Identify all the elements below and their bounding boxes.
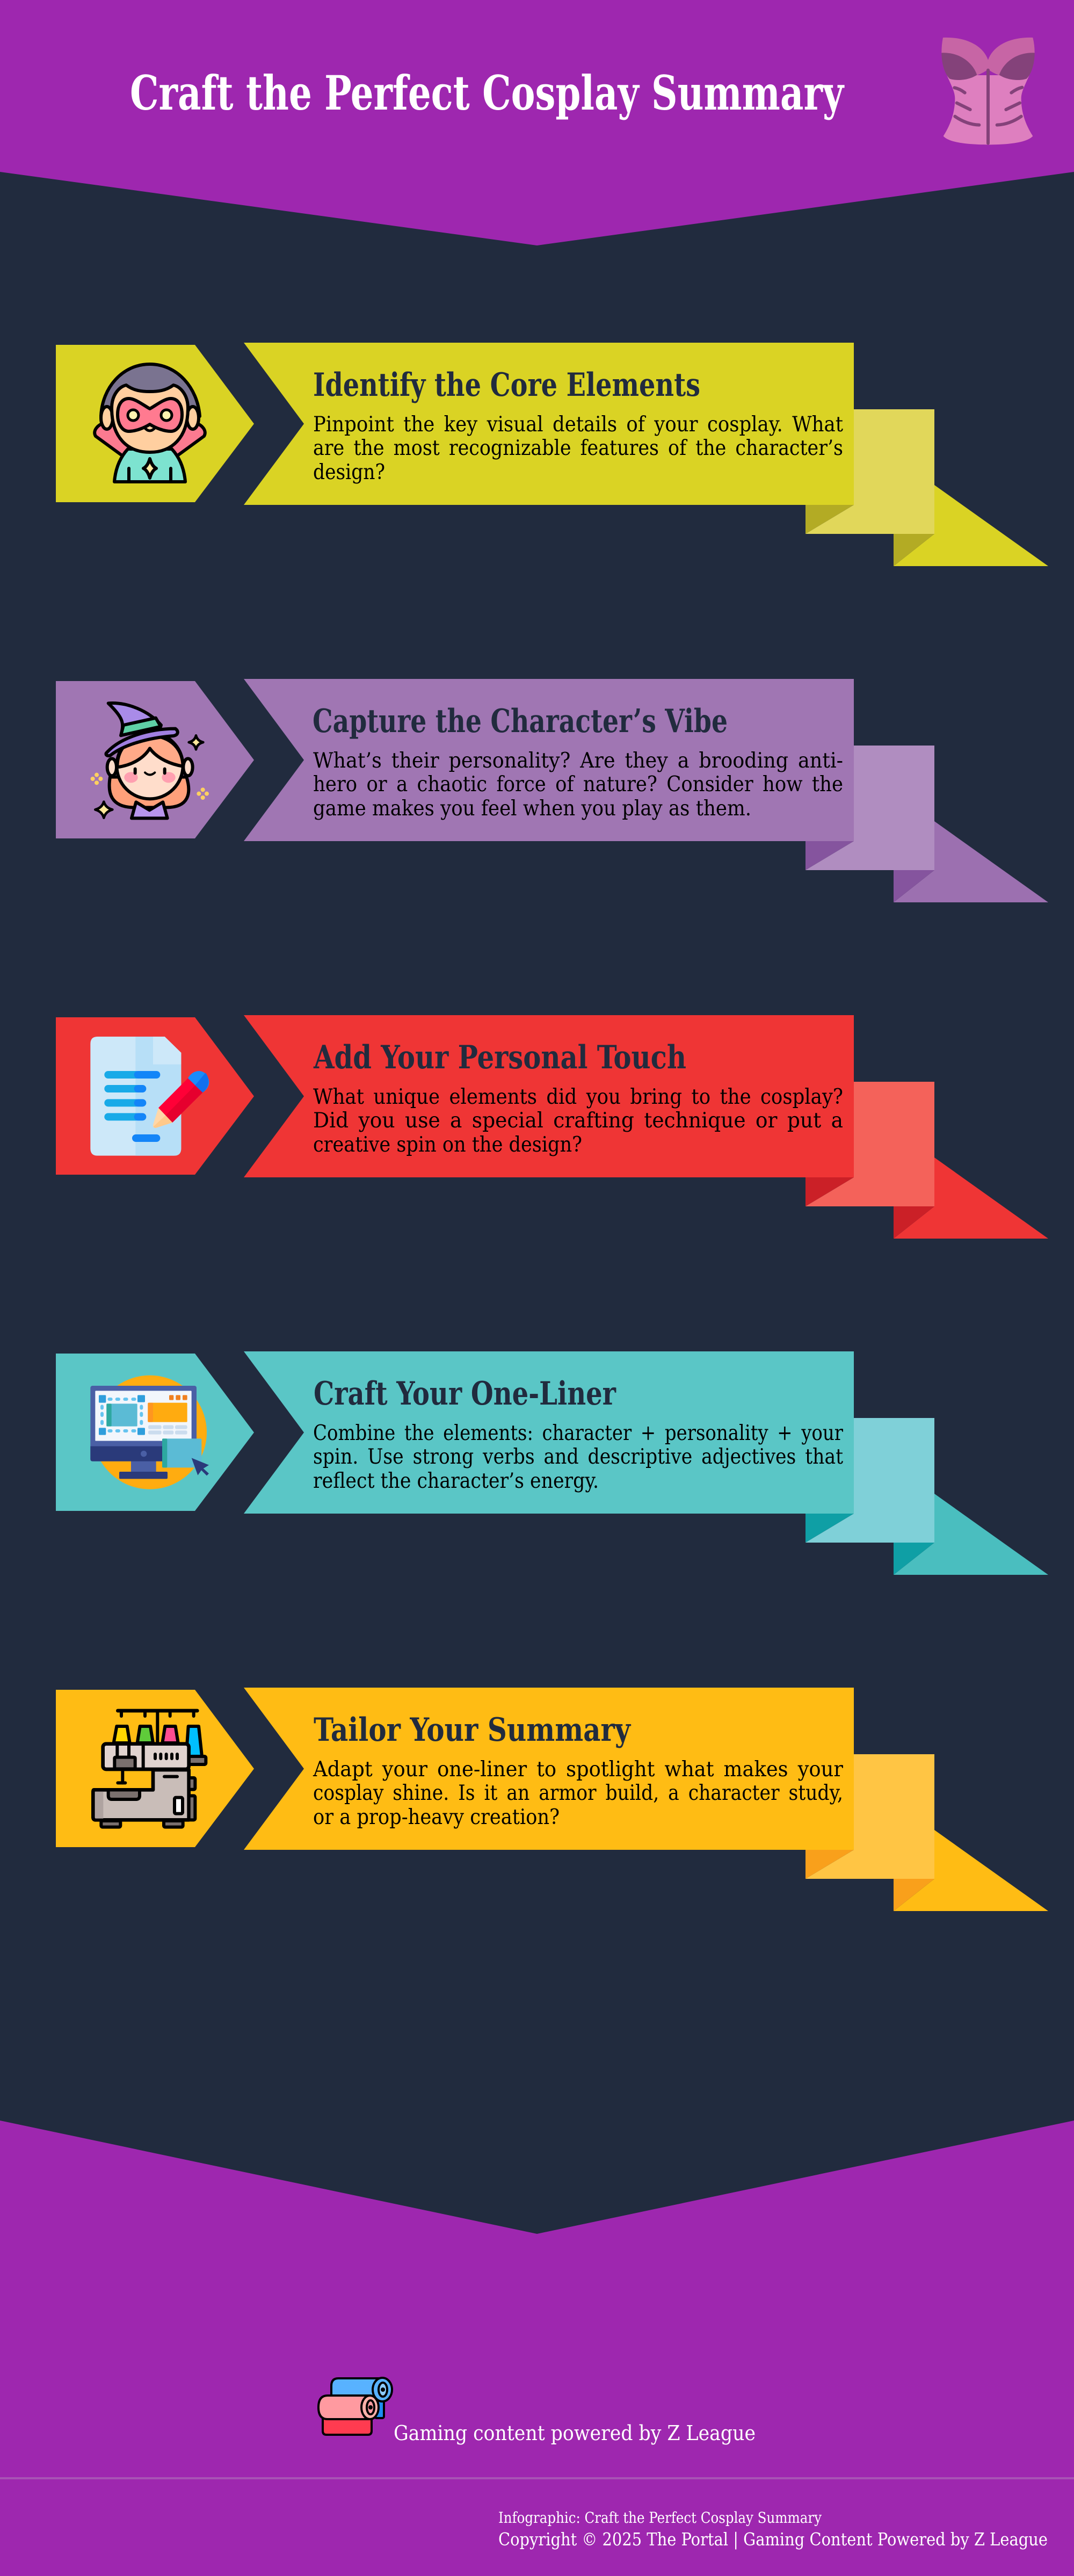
step 1: identify the core elements	[56, 343, 1048, 566]
ribbon tail	[806, 1418, 1048, 1575]
heading: Identify the Core Elements	[313, 366, 700, 404]
icon: document and pencil	[90, 1037, 209, 1156]
body text: Adapt your one-liner to spotlight what makes your	[313, 1757, 843, 1782]
chevron banner	[244, 679, 854, 841]
body text: cosplay shine. Is it an armor build, a character study,	[313, 1781, 843, 1805]
copyright line: Copyright © 2025 The Portal | Gaming Content Powered by Z League	[498, 2529, 1048, 2550]
icon: masked hero	[95, 364, 205, 482]
chevron banner	[244, 343, 854, 505]
body text: or a prop-heavy creation?	[313, 1805, 560, 1829]
heading: Tailor Your Summary	[314, 1711, 631, 1749]
footer band	[0, 2121, 1074, 2576]
ribbon tail	[806, 1754, 1048, 1911]
icon: fabric rolls	[318, 2378, 392, 2435]
body text: spin. Use strong verbs and descriptive adjectives that	[313, 1445, 843, 1469]
body text	[313, 1421, 843, 1493]
ribbon tail	[806, 1082, 1048, 1239]
icon: witch	[91, 703, 209, 818]
step 3: add your personal touch	[56, 1015, 1048, 1239]
body text: What’s their personality? Are they a brooding anti-	[313, 749, 843, 773]
ribbon tail	[806, 746, 1048, 902]
chevron banner	[244, 1015, 854, 1177]
body text: game makes you feel when you play as them.	[313, 797, 751, 821]
body text	[313, 1085, 843, 1157]
body text: Combine the elements: character + personality + your	[313, 1421, 843, 1445]
body text: What unique elements did you bring to the cosplay?	[313, 1085, 843, 1109]
icon tab	[56, 345, 254, 502]
body text	[313, 1757, 843, 1829]
body text: Pinpoint the key visual details of your cosplay. What	[313, 413, 843, 437]
icon tab	[56, 1017, 254, 1175]
body text	[313, 749, 843, 821]
step 5: tailor your summary	[56, 1688, 1048, 1911]
heading: Capture the Character’s Vibe	[313, 703, 728, 740]
icon tab	[56, 1354, 254, 1511]
icon tab	[56, 681, 254, 838]
icon: sewing machine	[93, 1711, 206, 1827]
icon: monitor editor	[90, 1376, 209, 1489]
header band	[0, 0, 1074, 245]
body text: hero or a chaotic force of nature? Consider how the	[313, 772, 843, 797]
body text: are the most recognizable features of the character’s	[313, 436, 843, 460]
step 4: craft your one-liner	[56, 1351, 1048, 1575]
chevron banner	[244, 1351, 854, 1514]
title: Craft the Perfect Cosplay Summary	[130, 65, 845, 121]
chevron banner	[244, 1688, 854, 1850]
body text: reflect the character’s energy.	[313, 1469, 599, 1493]
body text: Did you use a special crafting technique or put a	[313, 1109, 843, 1133]
body text	[313, 413, 843, 484]
heading: Add Your Personal Touch	[313, 1039, 686, 1076]
heading: Craft Your One-Liner	[314, 1375, 616, 1413]
footer credit: Infographic: Craft the Perfect Cosplay Summary	[498, 2509, 822, 2527]
step 2: capture the character's vibe	[56, 679, 1048, 902]
footer tagline: Gaming content powered by Z League	[394, 2421, 756, 2445]
icon tab	[56, 1690, 254, 1847]
body text: design?	[313, 460, 385, 484]
body text: creative spin on the design?	[313, 1133, 582, 1157]
icon: corset	[941, 38, 1035, 144]
ribbon tail	[806, 409, 1048, 566]
